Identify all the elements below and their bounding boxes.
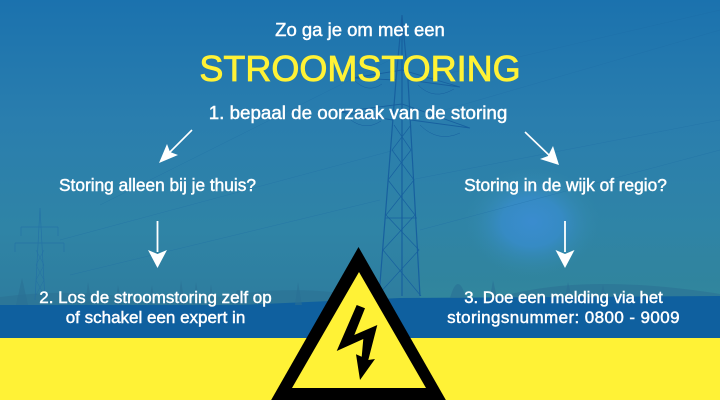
step 3 text (447, 288, 680, 327)
intro line: Zo ga je om met een (275, 19, 445, 40)
question: left branch: Storing alleen bij je thuis? (59, 174, 256, 194)
step 2 text: 2. Los de stroomstoring zelf op (39, 288, 272, 307)
step 3 text: storingsnummer: 0800 - 9009 (447, 308, 680, 326)
question: right branch: Storing in de wijk of regio? (464, 174, 667, 194)
step 2 text (39, 288, 272, 327)
step 3 text: 3. Doe een melding via het (464, 288, 663, 307)
step 1 text: 1. bepaal de oorzaak van de storing (209, 102, 507, 123)
step 2 text: of schakel een expert in (66, 308, 245, 326)
main title: STROOMSTORING (199, 48, 521, 89)
